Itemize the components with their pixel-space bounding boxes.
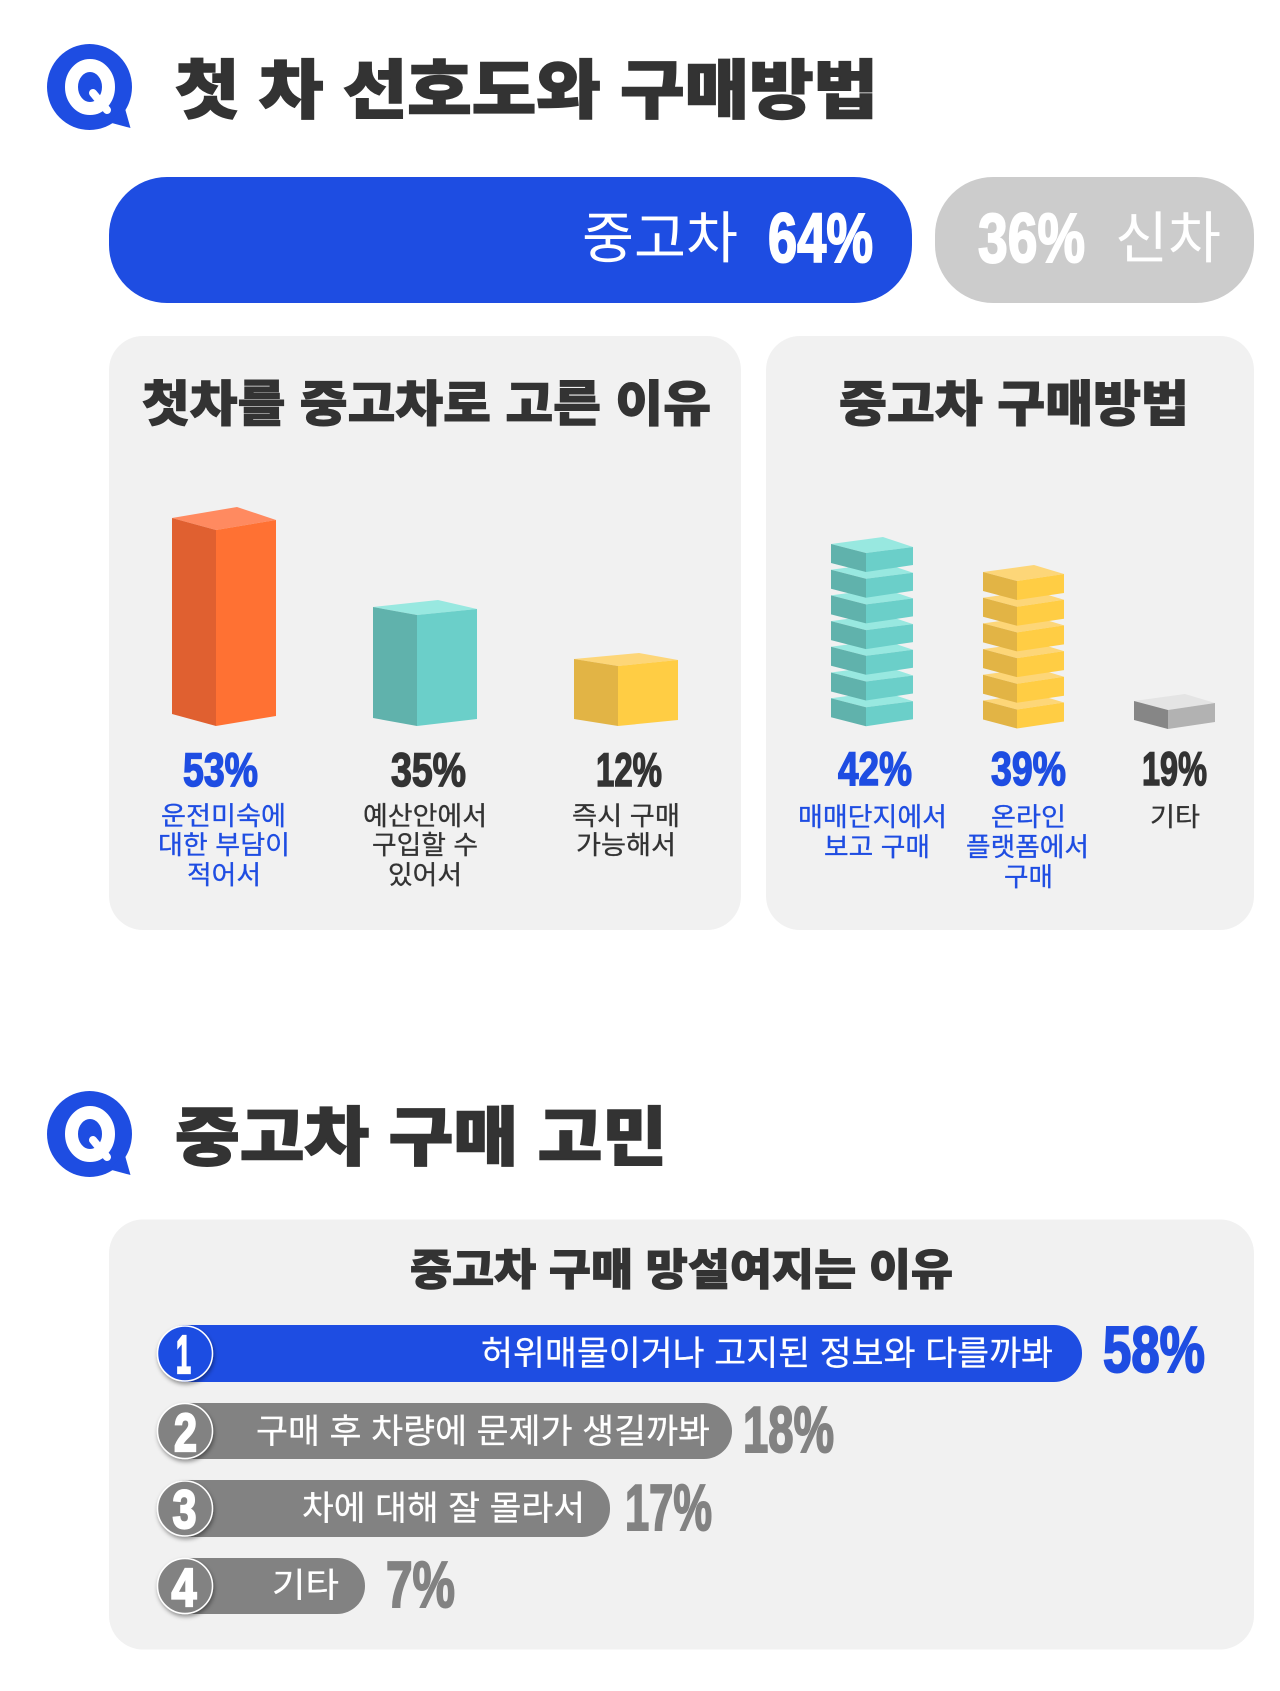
bar: 19% gray xyxy=(1134,694,1215,729)
label: 42% dealer complex: 42% xyxy=(838,742,912,795)
ranked bar 2: 18% xyxy=(158,1393,834,1466)
label: 35% within budget: 있어서 xyxy=(388,860,462,890)
split bar: new car 36% xyxy=(935,177,1254,303)
ranked bar 3: 17%: 차에 대해 잘 몰라서 xyxy=(302,1490,585,1528)
ranked bar 4: 7%: 4 xyxy=(172,1558,196,1618)
ranked bar 1: 58% xyxy=(158,1313,1205,1386)
split bar: used car 64%: 중고차 xyxy=(582,207,738,270)
bar: 12% yellow xyxy=(574,653,678,726)
stacked bar: 39% yellow xyxy=(983,565,1064,728)
label: 53% no-driving-skill burden: 적어서 xyxy=(187,860,261,890)
label: 42% dealer complex xyxy=(798,742,947,862)
icon: Q speech bubble 2 xyxy=(47,1091,132,1177)
panel heading: 중고차 구매방법 xyxy=(839,378,1189,432)
label: 53% no-driving-skill burden: 운전미숙에 xyxy=(161,801,286,831)
ranked bar 3: 17% xyxy=(158,1471,712,1544)
label: 53% no-driving-skill burden xyxy=(158,743,290,890)
panel: used car purchase method xyxy=(766,336,1254,930)
label: 35% within budget: 예산안에서 xyxy=(363,801,487,831)
ranked bar 4: 7%: 7% xyxy=(386,1548,455,1621)
ranked bar 2: 18%: 18% xyxy=(743,1393,834,1466)
ranked bar 2: 18%: 2 xyxy=(174,1403,197,1463)
split bar: used car 64% xyxy=(109,177,912,303)
title: first car preference and purchase method: 첫 차 선호도와 구매방법 xyxy=(175,55,878,127)
split bar: new car 36%: 36% xyxy=(978,199,1085,277)
label: 12% immediate purchase xyxy=(572,743,680,860)
split bar: used car 64%: 64% xyxy=(768,199,873,277)
ranked bar 1: 58%: 58% xyxy=(1103,1313,1205,1386)
label: 35% within budget: 35% xyxy=(391,743,466,796)
label: 39% online platform: 39% xyxy=(991,742,1066,795)
bar: 53% orange xyxy=(172,507,276,726)
label: 12% immediate purchase: 즉시 구매 xyxy=(572,801,680,831)
bar: 35% teal xyxy=(373,600,477,726)
label: 35% within budget xyxy=(363,743,487,890)
label: 19% other: 19% xyxy=(1142,742,1207,795)
label: 39% online platform: 온라인 xyxy=(991,802,1066,832)
label: 35% within budget: 구입할 수 xyxy=(372,830,478,860)
stacked bar: 42% teal xyxy=(831,537,913,726)
label: 42% dealer complex: 매매단지에서 xyxy=(798,802,947,832)
ranked bar 1: 58%: 허위매물이거나 고지된 정보와 다를까봐 xyxy=(481,1335,1053,1373)
label: 53% no-driving-skill burden: 대한 부담이 xyxy=(158,830,290,860)
label: 53% no-driving-skill burden: 53% xyxy=(183,743,258,796)
ranked bar 3: 17%: 17% xyxy=(625,1471,712,1544)
ranked bar 4: 7%: 기타 xyxy=(272,1567,339,1605)
icon: Q speech bubble xyxy=(47,44,132,130)
label: 42% dealer complex: 보고 구매 xyxy=(824,832,930,862)
label: 19% other xyxy=(1142,742,1207,832)
label: 39% online platform: 플랫폼에서 xyxy=(966,832,1089,862)
title: used car purchase worries: 중고차 구매 고민 xyxy=(175,1102,667,1174)
panel heading: 첫차를 중고차로 고른 이유 xyxy=(142,378,711,432)
label: 19% other: 기타 xyxy=(1150,802,1200,832)
label: 12% immediate purchase: 12% xyxy=(596,743,662,796)
label: 39% online platform: 구매 xyxy=(1004,862,1053,892)
label: 39% online platform xyxy=(966,742,1089,892)
split bar: new car 36%: 신차 xyxy=(1115,207,1221,270)
panel: reasons for choosing used car xyxy=(109,336,741,930)
ranked bar 2: 18%: 구매 후 차량에 문제가 생길까봐 xyxy=(256,1413,710,1451)
ranked bar 3: 17%: 3 xyxy=(172,1480,196,1540)
panel: reasons for hesitating xyxy=(109,1220,1254,1650)
ranked bar 4: 7% xyxy=(158,1548,455,1621)
label: 12% immediate purchase: 가능해서 xyxy=(576,830,676,860)
ranked bar 1: 58%: 1 xyxy=(176,1325,191,1385)
panel heading: 중고차 구매 망설여지는 이유 xyxy=(410,1247,953,1295)
